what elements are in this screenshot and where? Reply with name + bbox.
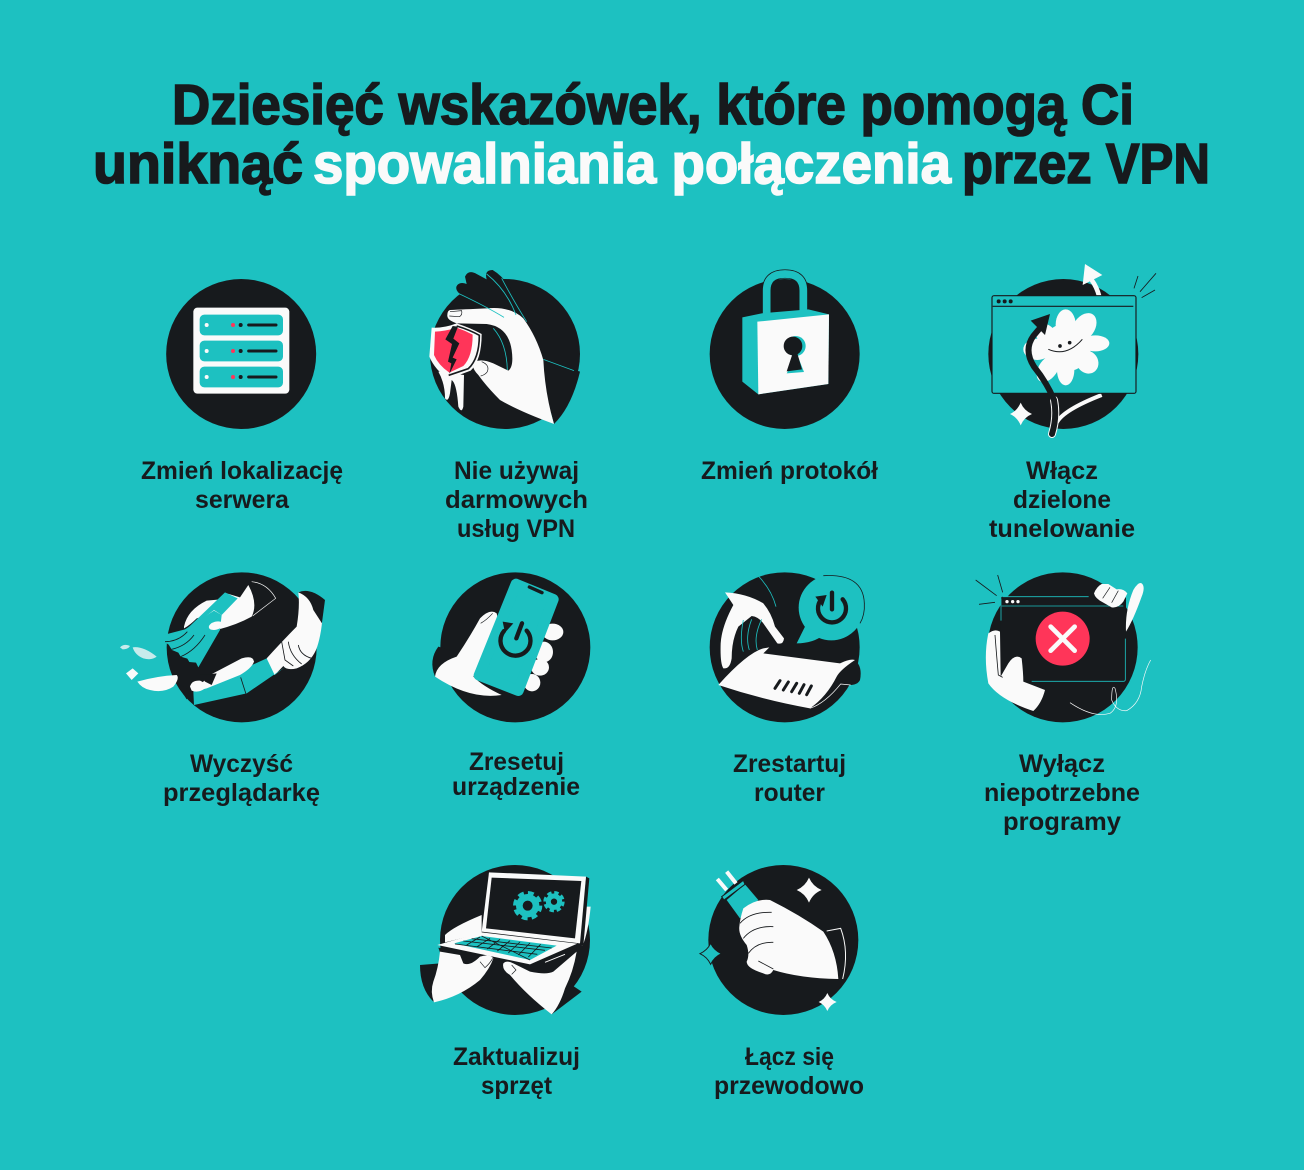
- label: browser: Wyczyść: [190, 750, 293, 778]
- icon: padlock: [710, 274, 860, 429]
- label: free VPN: usług VPN: [457, 515, 575, 543]
- label: router: router: [754, 779, 825, 807]
- label: programs: niepotrzebne: [984, 779, 1140, 807]
- icon: split tunneling: [988, 264, 1156, 434]
- label: server: serwera: [195, 486, 290, 514]
- icon: close programs: [976, 572, 1151, 722]
- label: hardware: Zaktualizuj: [453, 1043, 580, 1071]
- label: browser: [163, 750, 320, 807]
- label: free VPN: [445, 457, 588, 543]
- label: reset: Zresetuj: [469, 748, 564, 776]
- icon: browser cleaning: [120, 572, 325, 722]
- label: reset: urządzenie: [452, 773, 580, 801]
- label: split tunneling: dzielone: [1013, 486, 1111, 514]
- title: [93, 73, 1210, 196]
- label: hardware: [453, 1043, 580, 1100]
- label: split tunneling: tunelowanie: [989, 515, 1135, 543]
- label: free VPN: Nie używaj: [454, 457, 579, 485]
- title: przez VPN: [962, 132, 1210, 196]
- label: hardware: sprzęt: [481, 1072, 553, 1100]
- label: programs: Wyłącz: [1019, 750, 1105, 778]
- icon: hand with broken shield: [429, 270, 580, 429]
- label: split tunneling: Włącz: [1026, 457, 1098, 485]
- label: programs: [984, 750, 1140, 836]
- label: protocol: Zmień protokół: [701, 457, 878, 485]
- label: router: [733, 750, 846, 807]
- label: server: Zmień lokalizację: [141, 457, 343, 485]
- label: free VPN: darmowych: [445, 486, 588, 514]
- label: wired: [714, 1043, 864, 1100]
- label: browser: przeglądarkę: [163, 779, 320, 807]
- label: server: [141, 457, 343, 514]
- icon: wired plug: [700, 865, 858, 1015]
- title: Dziesięć wskazówek, które pomogą Ci: [172, 73, 1134, 137]
- label: reset: [452, 748, 580, 801]
- label: programs: programy: [1003, 808, 1121, 836]
- label: split tunneling: [989, 457, 1135, 543]
- icon: laptop update: [420, 865, 591, 1015]
- label: wired: Łącz się: [745, 1043, 834, 1071]
- label: wired: przewodowo: [714, 1072, 864, 1100]
- icon: router restart: [710, 572, 864, 722]
- title: spowalniania połączenia: [313, 132, 952, 196]
- title: uniknąć: [93, 132, 303, 196]
- icon: phone reset: [432, 572, 590, 722]
- label: router: Zrestartuj: [733, 750, 846, 778]
- icon: server: [166, 279, 316, 429]
